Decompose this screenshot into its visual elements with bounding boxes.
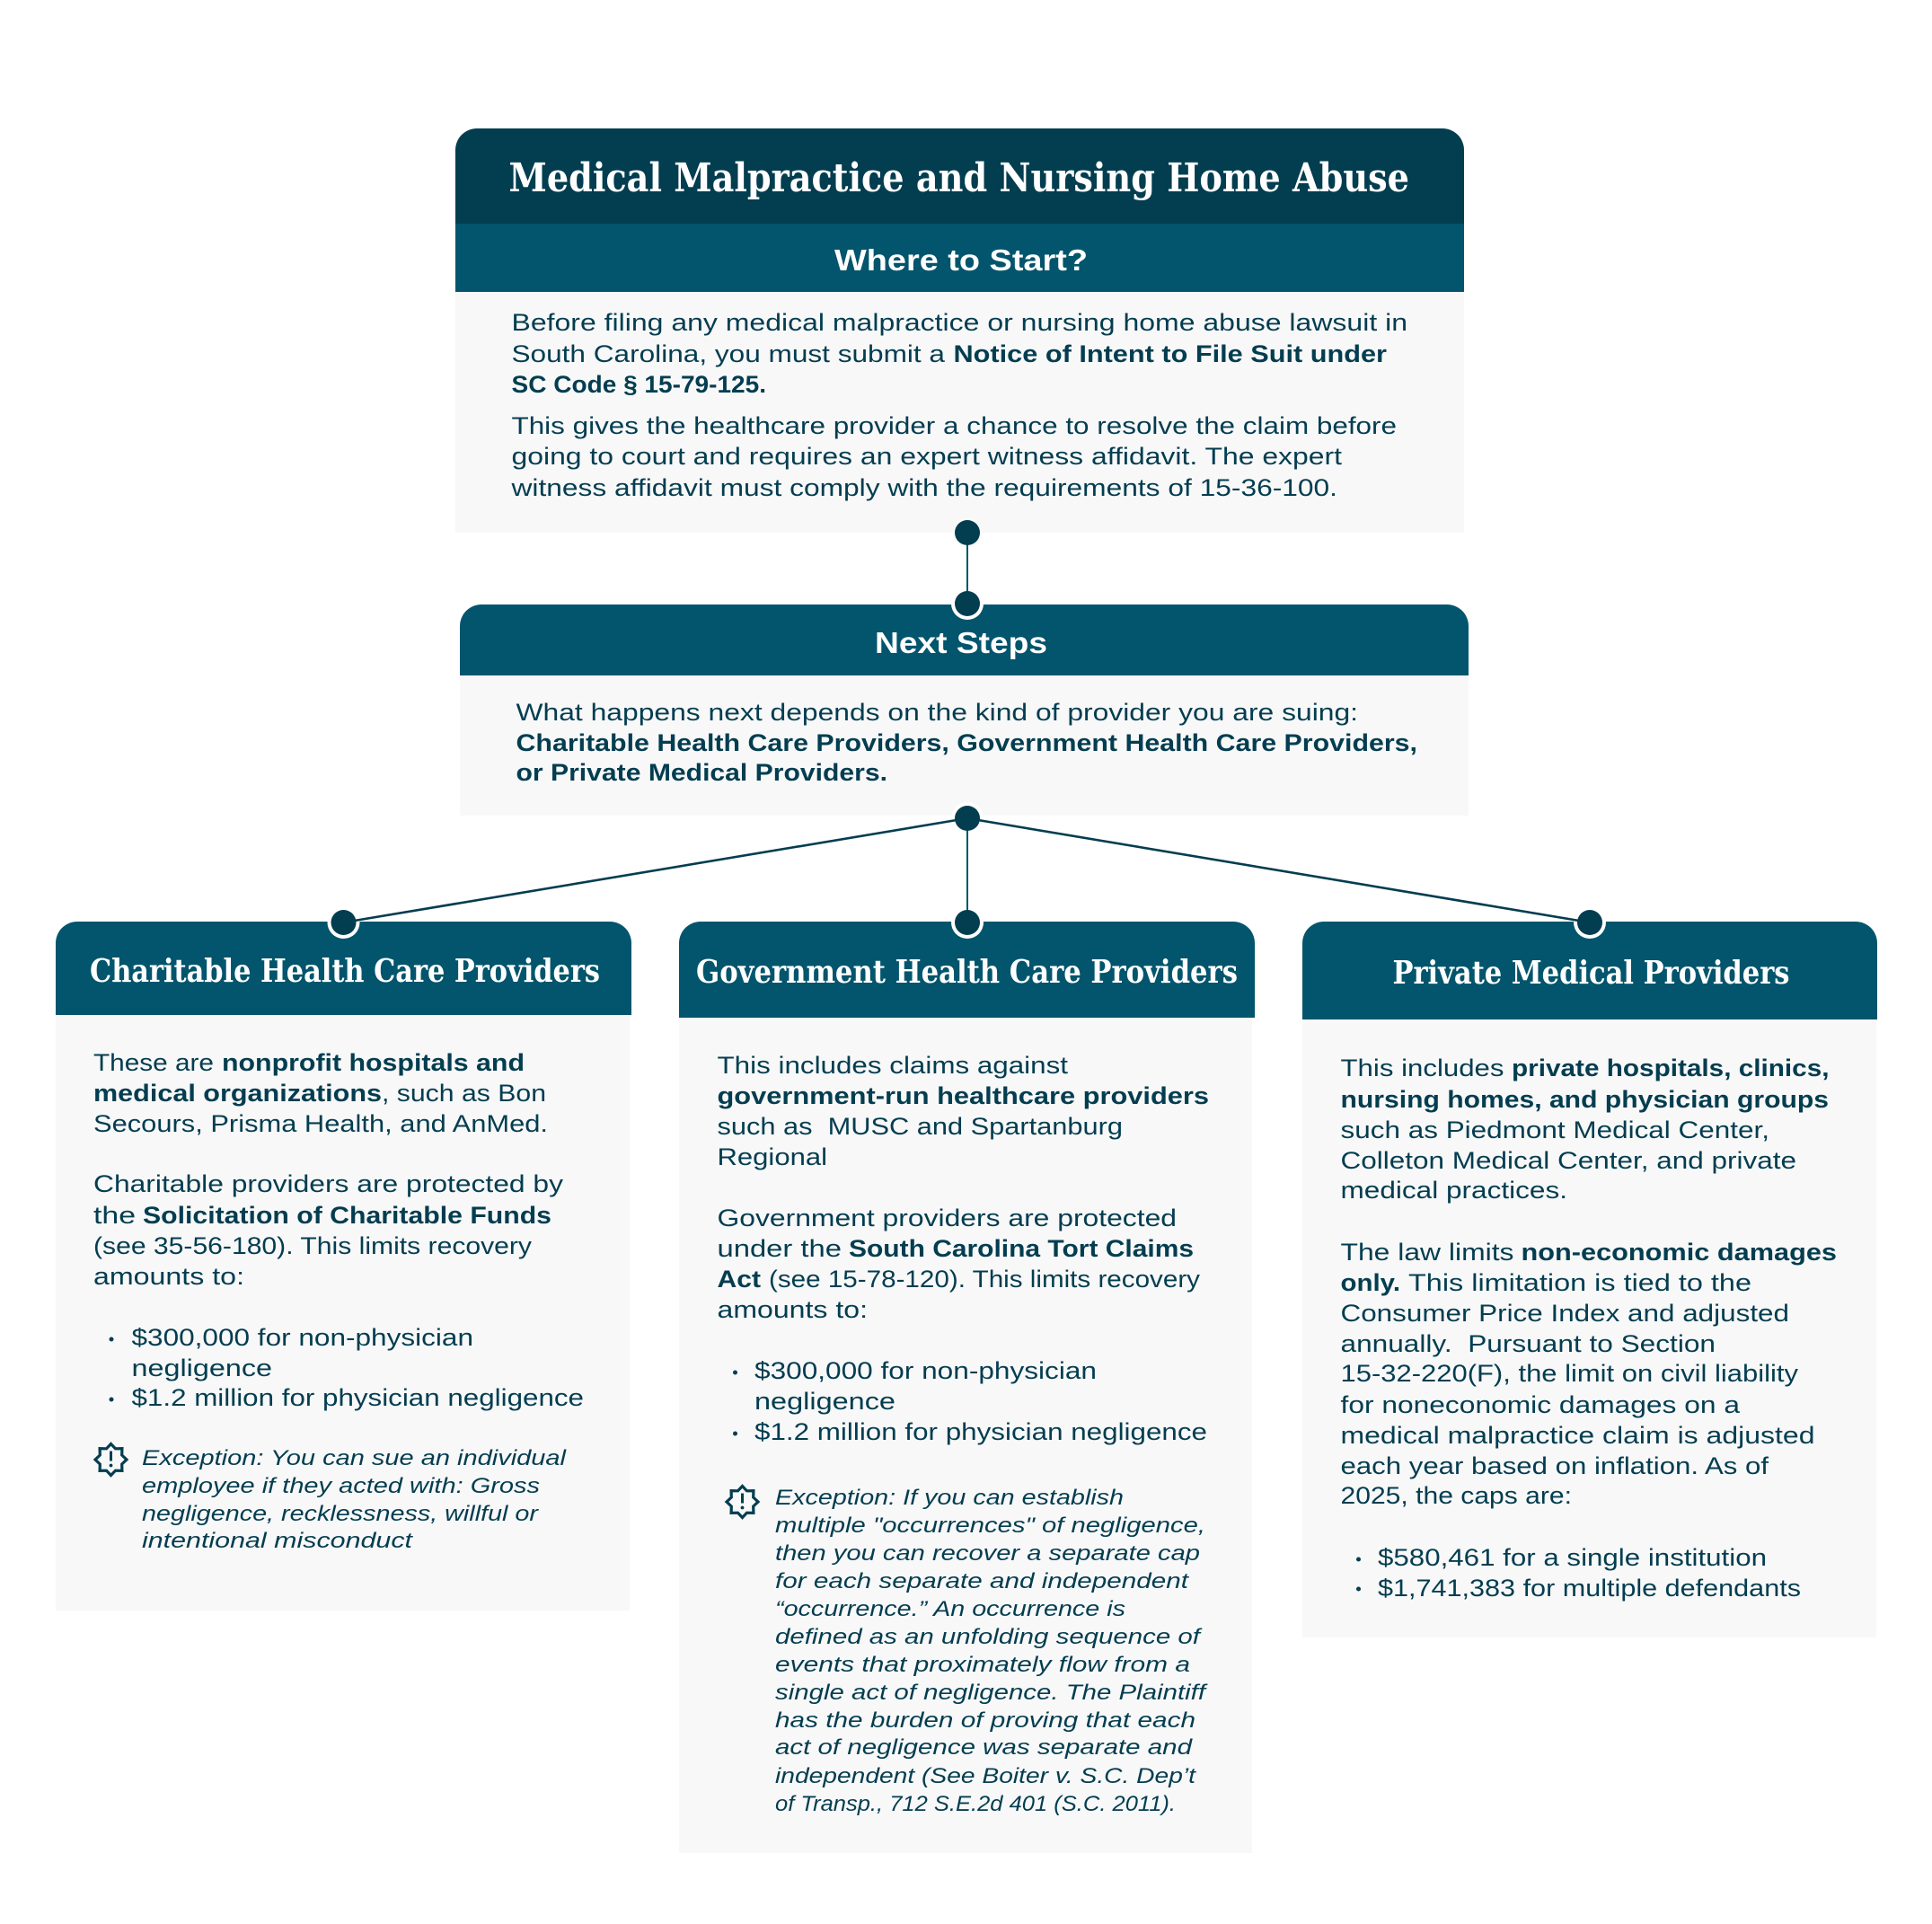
title: Medical Malpractice and Nursing Home Abuse bbox=[508, 155, 1409, 201]
text: government protection: South Carolina Tort Claims bbox=[849, 1235, 1194, 1262]
text: notice of intent: Notice of Intent to File Suit under bbox=[954, 340, 1387, 367]
text: charitable protection: Solicitation of Charitable Funds bbox=[143, 1202, 551, 1229]
callout: government exception: then you can recover a separate cap bbox=[775, 1541, 1200, 1566]
subheading bar bbox=[455, 224, 1464, 292]
text: government protection: under the bbox=[717, 1235, 842, 1262]
text: government definition: Regional bbox=[717, 1143, 827, 1170]
panel: where to start bbox=[455, 128, 1464, 533]
bullet list: charitable caps bbox=[110, 1324, 584, 1411]
text: private definition bbox=[1340, 1055, 1829, 1204]
subheading: where to start: Where to Start? bbox=[834, 244, 1088, 278]
text: charitable definition: nonprofit hospitals and bbox=[222, 1049, 525, 1076]
text: private definition: Colleton Medical Center, and private bbox=[1340, 1147, 1796, 1174]
text: charitable definition bbox=[93, 1049, 548, 1137]
text: private definition: This includes bbox=[1340, 1055, 1504, 1081]
text: expert affidavit: This gives the healthcare provider a chance to resolve the claim before bbox=[512, 412, 1397, 439]
government header bbox=[679, 922, 1255, 1018]
text: government protection: (see 15-78-120). This limits recovery bbox=[769, 1266, 1201, 1293]
callout: government exception: independent (See Boiter v. S.C. Dep’t bbox=[775, 1764, 1196, 1788]
text: private damages limits: non-economic damages bbox=[1522, 1239, 1837, 1266]
text: charitable definition: Secours, Prisma Health, and AnMed. bbox=[93, 1110, 548, 1137]
text: government definition: such as MUSC and Spartanburg bbox=[717, 1113, 1123, 1140]
heading: charitable: Charitable Health Care Providers bbox=[90, 953, 600, 990]
text: charitable definition: , such as Bon bbox=[382, 1080, 546, 1107]
text: charitable definition: medical organizations bbox=[93, 1080, 382, 1107]
text: notice of intent: Before filing any medical malpractice or nursing home abuse lawsuit in bbox=[512, 309, 1407, 336]
callout: government exception bbox=[775, 1486, 1208, 1816]
text: government protection: Act bbox=[717, 1266, 761, 1293]
text: next steps body: Charitable Health Care Providers, Government Health Care Providers, bbox=[516, 729, 1417, 756]
charitable header bbox=[56, 922, 631, 1015]
callout: government exception: has the burden of proving that each bbox=[775, 1708, 1195, 1733]
panel: government providers bbox=[679, 922, 1255, 1853]
text: private damages limits bbox=[1340, 1239, 1837, 1509]
panel: next steps bbox=[460, 605, 1469, 816]
next steps header bbox=[460, 605, 1469, 675]
callout: charitable exception: intentional misconduct bbox=[142, 1529, 413, 1553]
callout: government exception: multiple "occurrences" of negligence, bbox=[775, 1514, 1205, 1538]
text: private damages limits: 2025, the caps are: bbox=[1340, 1482, 1572, 1509]
text: private damages limits: Consumer Price Index and adjusted bbox=[1340, 1300, 1789, 1327]
text: next steps body bbox=[516, 699, 1417, 786]
text: government definition bbox=[717, 1052, 1209, 1170]
callout: government exception: for each separate and independent bbox=[775, 1569, 1189, 1593]
connector: where to start to next steps bbox=[951, 517, 984, 620]
bullet list: government caps bbox=[733, 1357, 1207, 1445]
text: private damages limits: each year based on inflation. As of bbox=[1340, 1452, 1769, 1479]
text: private damages limits: only. bbox=[1340, 1269, 1400, 1296]
callout: charitable exception: negligence, recklessness, willful or bbox=[142, 1502, 539, 1526]
callout: charitable exception bbox=[142, 1446, 567, 1553]
text: government definition: This includes claims against bbox=[717, 1052, 1069, 1079]
connector: next steps to three provider cards bbox=[327, 802, 1606, 939]
text: private damages limits: 15-32-220(F), the limit on civil liability bbox=[1340, 1360, 1799, 1387]
text: private definition: private hospitals, clinics, bbox=[1512, 1055, 1829, 1081]
text: charitable definition: These are bbox=[93, 1049, 214, 1076]
text: expert affidavit: witness affidavit must comply with the requirements of 15-36-100. bbox=[510, 474, 1337, 501]
text: private definition: such as Piedmont Medical Center, bbox=[1340, 1116, 1769, 1143]
text: private damages limits: The law limits bbox=[1340, 1239, 1514, 1266]
text: next steps body: What happens next depends on the kind of provider you are suing: bbox=[516, 699, 1358, 726]
callout: government exception: events that proximately flow from a bbox=[775, 1653, 1190, 1677]
text: government protection bbox=[717, 1205, 1201, 1323]
text: private damages limits: for noneconomic damages on a bbox=[1340, 1391, 1740, 1418]
text: charitable protection: amounts to: bbox=[93, 1263, 244, 1290]
callout: government exception: single act of negligence. The Plaintiff bbox=[775, 1681, 1208, 1705]
callout: government exception: Exception: If you can establish bbox=[775, 1486, 1124, 1510]
text: private damages limits: This limitation is tied to the bbox=[1408, 1269, 1751, 1296]
callout: charitable exception: employee if they acted with: Gross bbox=[142, 1474, 540, 1498]
bullet list: charitable caps: negligence bbox=[131, 1355, 272, 1381]
text: notice of intent: SC Code § 15-79-125. bbox=[512, 371, 766, 398]
heading: private: Private Medical Providers bbox=[1392, 955, 1789, 992]
callout: government exception: of Transp., 712 S.E.2d 401 (S.C. 2011). bbox=[775, 1792, 1176, 1816]
bullet list: government caps: negligence bbox=[754, 1388, 895, 1415]
text: private definition: medical practices. bbox=[1340, 1177, 1567, 1204]
text: expert affidavit bbox=[510, 412, 1397, 501]
heading: government: Government Health Care Providers bbox=[696, 954, 1238, 991]
bullet list: charitable caps: $300,000 for non-physician bbox=[131, 1324, 473, 1351]
text: government definition: government-run healthcare providers bbox=[717, 1082, 1209, 1109]
callout: charitable exception: Exception: You can sue an individual bbox=[142, 1446, 567, 1470]
text: private damages limits: annually. Pursuant to Section bbox=[1340, 1330, 1716, 1357]
text: private damages limits: medical malpractice claim is adjusted bbox=[1340, 1422, 1814, 1449]
panel: charitable providers bbox=[56, 922, 631, 1611]
text: charitable protection: (see 35-56-180). This limits recovery bbox=[93, 1232, 533, 1259]
bullet list: private caps: $580,461 for a single institution bbox=[1378, 1544, 1767, 1571]
text: charitable protection: the bbox=[93, 1202, 136, 1229]
bullet list: private caps bbox=[1356, 1544, 1801, 1602]
callout: government exception: defined as an unfolding sequence of bbox=[775, 1625, 1203, 1649]
text: government protection: amounts to: bbox=[717, 1296, 868, 1323]
icon: alert badge bbox=[727, 1486, 758, 1518]
bullet list: government caps: $1.2 million for physician negligence bbox=[754, 1418, 1207, 1445]
bullet list: private caps: $1,741,383 for multiple defendants bbox=[1378, 1575, 1801, 1602]
text: notice of intent: South Carolina, you must submit a bbox=[512, 340, 945, 367]
bullet list: charitable caps: $1.2 million for physician negligence bbox=[131, 1384, 584, 1411]
bullet list: government caps: $300,000 for non-physician bbox=[754, 1357, 1097, 1384]
text: charitable protection: Charitable providers are protected by bbox=[93, 1170, 564, 1197]
text: charitable protection bbox=[93, 1170, 564, 1290]
text: next steps body: or Private Medical Providers. bbox=[516, 759, 887, 786]
text: private definition: nursing homes, and physician groups bbox=[1340, 1086, 1829, 1113]
heading: next steps: Next Steps bbox=[875, 627, 1047, 660]
text: expert affidavit: going to court and requires an expert witness affidavit. The expert bbox=[512, 443, 1343, 470]
callout: government exception: act of negligence was separate and bbox=[775, 1735, 1194, 1760]
title banner bbox=[455, 128, 1464, 224]
callout: government exception: “occurrence.” An occurrence is bbox=[775, 1597, 1125, 1621]
text: notice of intent bbox=[512, 309, 1407, 398]
text: government protection: Government providers are protected bbox=[717, 1205, 1177, 1231]
panel: private providers bbox=[1302, 922, 1877, 1637]
private header bbox=[1302, 922, 1877, 1019]
icon: alert badge bbox=[95, 1444, 127, 1475]
